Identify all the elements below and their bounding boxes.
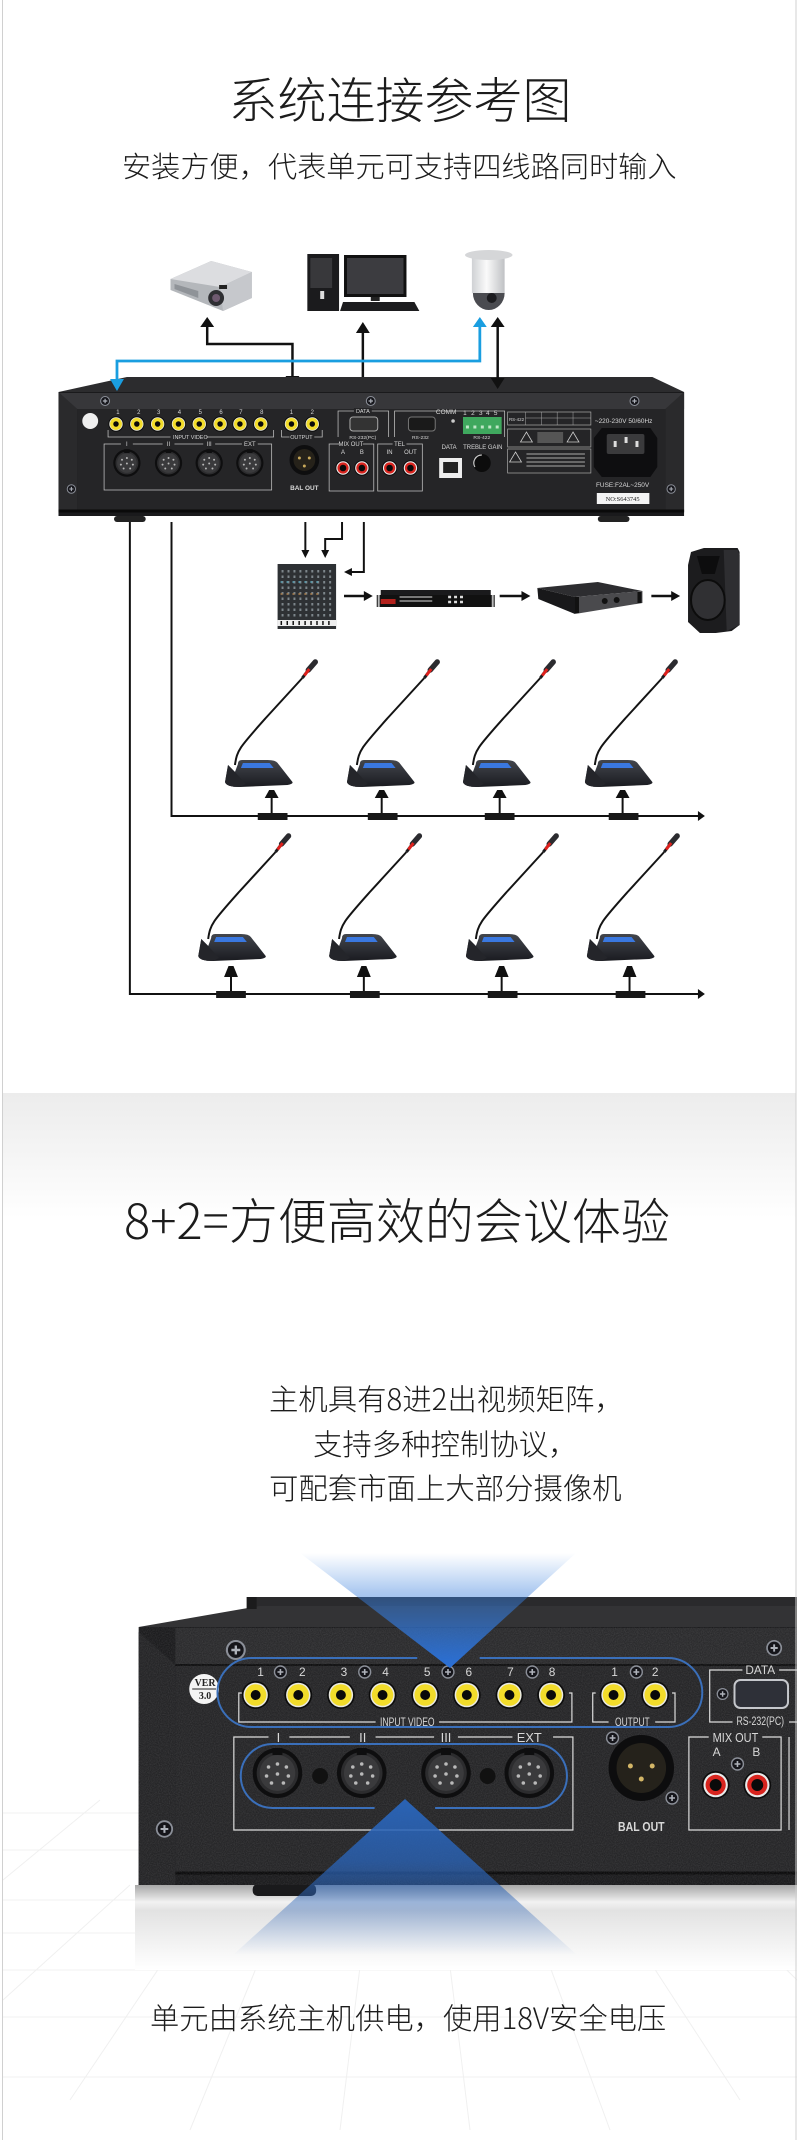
MIX OUT and TEL connectors: OUT (404, 450, 417, 456)
blue beam: top (300, 1553, 576, 1668)
text block: host description: 可配套市面上大部分摄像机 (269, 1466, 622, 1508)
unit DIN sockets (104, 441, 272, 490)
input video connectors: 5 (199, 410, 203, 416)
input video connectors: 4 (178, 410, 182, 416)
VER badge: 3.0 (199, 1691, 211, 1702)
arrow: amplifier to speaker (651, 591, 680, 601)
delegate unit 1 (225, 662, 315, 820)
power inlet: FUSE:F2AL~250V (596, 482, 650, 489)
icon: dome camera (465, 250, 513, 310)
unit DIN sockets: III (441, 1730, 451, 1745)
XLR balanced output: BAL OUT (618, 1819, 665, 1834)
delegate unit 7 (466, 836, 556, 998)
unit DIN sockets: II (167, 442, 171, 448)
delegate unit 4 (585, 662, 675, 820)
RS-232 and RS-422 ports: 4 (486, 410, 490, 417)
RS-232 and RS-422 ports: COMM (436, 409, 456, 416)
icon: audio mixer (278, 564, 336, 629)
delegate unit 8 (587, 836, 677, 998)
blue beam: bottom (233, 1799, 577, 1955)
arrow: mixer to processor (344, 591, 373, 601)
icon: audio processor (377, 590, 495, 607)
data port, treble gain: TREBLE GAIN (463, 445, 502, 451)
RS-232 and RS-422 ports: RS-422 (473, 435, 490, 441)
input video connectors: INPUT VIDEO (173, 435, 208, 441)
VER badge (189, 1674, 219, 1704)
connection diagram (58, 250, 740, 999)
delegate unit 5 (198, 836, 288, 998)
arrows: audio outputs to mixer (301, 522, 364, 576)
warning labels: RS-422 (509, 417, 525, 422)
RS-232 and RS-422 ports: DATA (356, 409, 370, 415)
MIX OUT and TEL connectors: A (341, 450, 345, 456)
MIX OUT and TEL connectors: IN (387, 450, 393, 456)
wiring: delegate bus line 1 (172, 522, 705, 821)
video connectors (239, 1665, 675, 1729)
power inlet: NO:S643745 (606, 496, 640, 503)
MIX OUT connectors: A (713, 1745, 721, 1759)
MIX OUT and TEL connectors: B (360, 450, 364, 456)
MIX OUT connectors (689, 1730, 789, 1830)
MIX OUT connectors: MIX OUT (713, 1730, 758, 1745)
unit DIN sockets: III (207, 442, 212, 448)
highlight ring: unit sockets (241, 1744, 567, 1808)
RS-232 and RS-422 ports: RS-232(PC) (349, 435, 377, 441)
text block: host description (269, 1377, 624, 1508)
icon: speaker (688, 548, 740, 633)
input video connectors: 1 (116, 410, 120, 416)
input video connectors: 1 (290, 410, 294, 416)
unit DIN sockets: I (126, 442, 128, 448)
RS-232 and RS-422 ports: 1 (463, 410, 467, 417)
input video connectors (108, 410, 322, 441)
delegate unit 3 (463, 662, 553, 820)
RS-232 data port (710, 1663, 797, 1728)
panel: 8+2 meeting experience (3, 1093, 797, 2140)
RS-232 and RS-422 ports: 2 (471, 410, 475, 417)
arrow: projector link (200, 317, 299, 387)
device close-up (139, 1597, 797, 1896)
video connectors: 3 (341, 1665, 348, 1679)
arrow: blue camera video link (110, 317, 487, 391)
XLR balanced output (607, 1732, 678, 1834)
input video connectors: 2 (311, 410, 315, 416)
row of delegate units 1 (225, 662, 675, 820)
wiring: delegate bus line 2 (130, 522, 705, 999)
text block: host description: 支持多种控制协议， (313, 1422, 578, 1464)
video connectors: 1 (611, 1665, 618, 1679)
video connectors: 7 (507, 1665, 514, 1679)
highlight ring: video connectors (217, 1658, 702, 1727)
icon: power amplifier (537, 582, 642, 614)
input video connectors: 2 (137, 410, 141, 416)
arrow: camera control link (491, 317, 505, 389)
unit DIN sockets: EXT (517, 1730, 542, 1745)
MIX OUT and TEL connectors (329, 441, 422, 491)
video connectors: 2 (299, 1665, 306, 1679)
delegate unit 2 (347, 662, 437, 820)
floor grid (3, 1800, 797, 2130)
panel: system connection diagram (58, 62, 740, 999)
XLR balanced output (289, 445, 319, 492)
RS-232 and RS-422 ports (338, 408, 505, 441)
video connectors: 6 (465, 1665, 472, 1679)
VER badge: VER (195, 1678, 216, 1689)
video connectors: 8 (549, 1665, 556, 1679)
delegate unit 6 (329, 836, 419, 998)
icon: desktop computer (307, 254, 419, 311)
rear device: host top lid and face (58, 377, 684, 522)
text block: power note: 单元由系统主机供电，使用18V安全电压 (150, 1996, 666, 2038)
video connectors: 4 (382, 1665, 389, 1679)
XLR balanced output: BAL OUT (290, 485, 319, 492)
input video connectors: 7 (239, 410, 243, 416)
input video connectors: OUTPUT (290, 435, 313, 441)
data port, treble gain (439, 445, 502, 478)
RS-232 and RS-422 ports: 3 (479, 410, 483, 417)
data port, treble gain: DATA (442, 445, 457, 451)
power inlet: ~220-230V 50/60Hz (595, 418, 652, 425)
MIX OUT and TEL connectors: TEL (394, 442, 406, 448)
MIX OUT connectors: B (752, 1745, 760, 1759)
video connectors: 5 (424, 1665, 431, 1679)
unit DIN sockets: I (277, 1730, 280, 1745)
subtitle: installation: 安装方便，代表单元可支持四线路同时输入 (122, 144, 677, 186)
input video connectors: 3 (157, 410, 161, 416)
input video connectors: 6 (219, 410, 223, 416)
unit DIN sockets: II (359, 1730, 366, 1745)
video connectors: OUTPUT (615, 1715, 650, 1729)
video connectors: INPUT VIDEO (380, 1715, 435, 1729)
warning labels (508, 412, 591, 473)
video connectors: 2 (652, 1665, 659, 1679)
arrow: computer link (356, 322, 370, 389)
reflection under device (135, 1885, 797, 1970)
icon: projector (171, 261, 252, 311)
unit DIN sockets: EXT (244, 442, 256, 448)
RS-232 data port: DATA (745, 1663, 775, 1677)
power inlet (594, 418, 657, 504)
title: system connection: 系统连接参考图 (228, 62, 572, 133)
input video connectors: 8 (260, 410, 264, 416)
arrow: processor to amplifier (500, 591, 530, 601)
title: 8+2: 8+2=方便高效的会议体验 (124, 1183, 670, 1254)
row of delegate units 2 (198, 836, 677, 998)
video connectors: 1 (257, 1665, 264, 1679)
RS-232 and RS-422 ports: RS-232 (412, 435, 429, 441)
text block: host description: 主机具有8进2出视频矩阵， (269, 1377, 624, 1419)
MIX OUT and TEL connectors: MIX OUT (339, 442, 364, 448)
unit DIN sockets (234, 1730, 573, 1830)
RS-232 and RS-422 ports: 5 (494, 410, 498, 417)
